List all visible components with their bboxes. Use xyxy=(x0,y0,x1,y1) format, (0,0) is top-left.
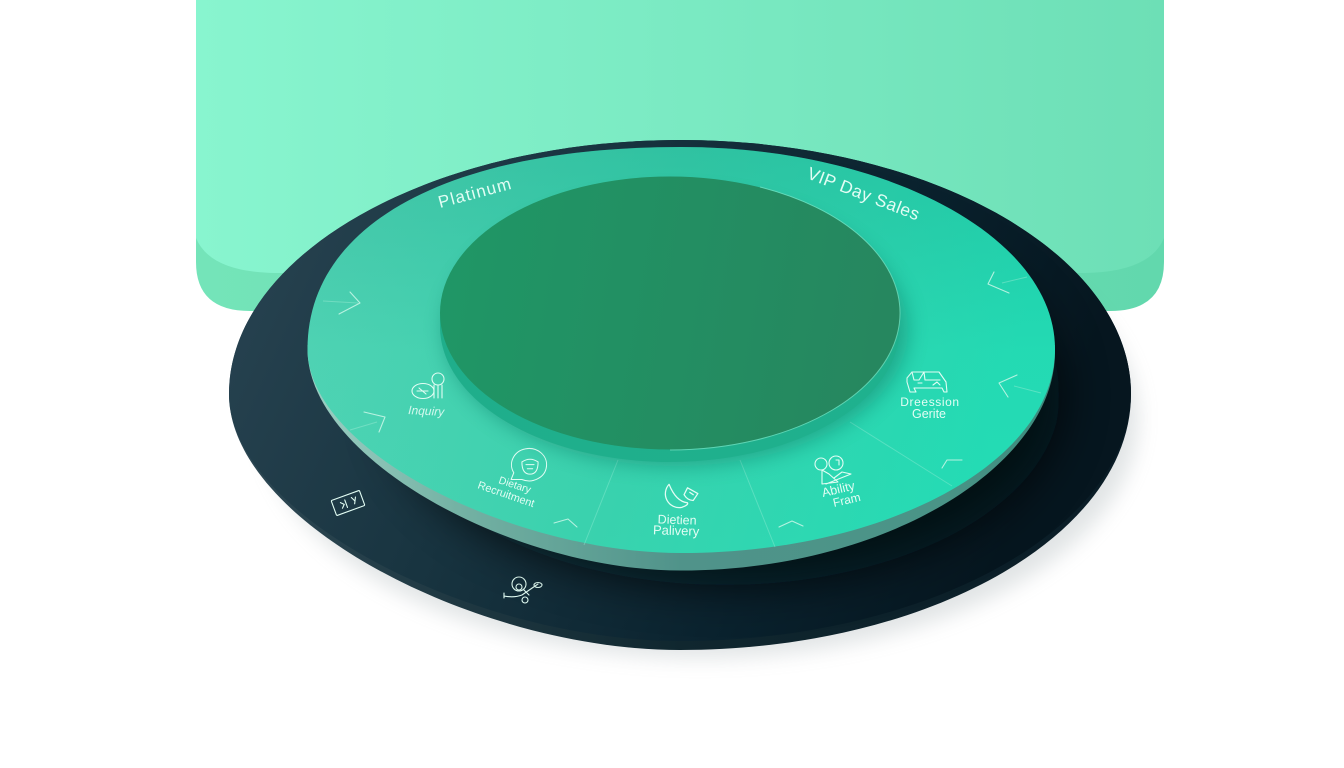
step: Dietien Delivery: Palivery xyxy=(653,522,700,539)
step: Dietary Recruitment: Dietary xyxy=(497,474,533,496)
icon: inquiry xyxy=(412,373,444,398)
step: Ability Fram xyxy=(815,456,862,510)
step: Dreession Gerite: Dreession xyxy=(900,395,960,409)
step: Dreession Gerite: Gerite xyxy=(912,407,946,421)
step: Ability Fram: Fram xyxy=(832,490,862,510)
teal disc xyxy=(308,147,1055,570)
step: Dietien Delivery: Dietien xyxy=(657,512,697,528)
heading: VIP Day Sales: VIP Day Sales xyxy=(805,163,923,224)
icon: figures xyxy=(815,456,851,484)
icon: calendar on base xyxy=(331,490,365,516)
dark base disc xyxy=(229,140,1131,650)
step: Dietary Recruitment xyxy=(476,448,547,510)
ground shadow xyxy=(262,178,1138,658)
icon: car xyxy=(907,372,947,392)
step: Inquiry xyxy=(408,373,446,419)
icon: bowl xyxy=(665,484,698,508)
step: Inquiry: Inquiry xyxy=(408,403,446,419)
step: Dietary Recruitment: Recruitment xyxy=(476,479,536,510)
step: Ability Fram: Ability xyxy=(821,479,857,500)
shadow of teal disc xyxy=(390,205,1060,585)
step: Dreession Gerite xyxy=(900,372,960,421)
heading: Platinum: Platinum xyxy=(436,174,514,212)
segment dividers xyxy=(584,422,952,547)
arrow markers xyxy=(323,272,1041,527)
step: Dietien Delivery xyxy=(653,484,700,539)
shadow of centre disc xyxy=(444,194,908,466)
icon: speech bubble xyxy=(511,448,547,481)
back panel xyxy=(196,0,1164,311)
icon: scissors and key on base xyxy=(504,577,542,603)
centre green disc xyxy=(440,176,900,462)
